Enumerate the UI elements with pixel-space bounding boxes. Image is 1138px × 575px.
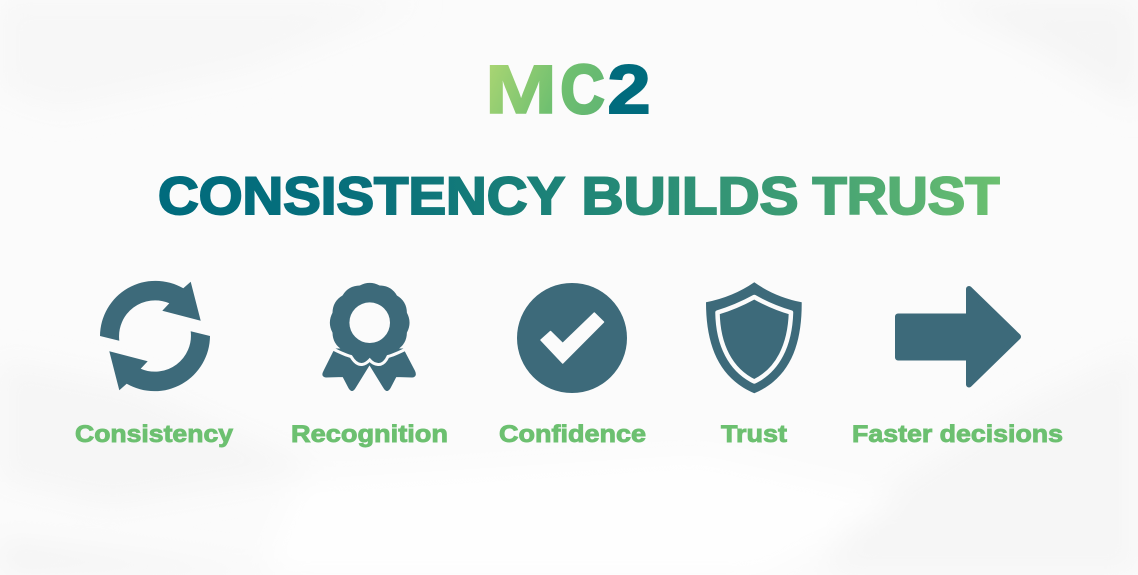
title: CONSISTENCY <box>158 167 565 226</box>
icon: circular arrows <box>100 281 210 391</box>
item: confidence <box>499 283 646 448</box>
item: recognition <box>291 283 448 448</box>
label: consistency: Consistency <box>75 421 234 448</box>
label: trust: Trust <box>721 421 787 448</box>
logo: MC2: 2 <box>608 51 650 128</box>
icon: shield <box>706 282 802 393</box>
logo: MC2: M <box>485 51 557 128</box>
item: faster decisions <box>852 289 1063 448</box>
icon: check circle <box>517 283 627 393</box>
title: TRUST <box>812 167 1000 226</box>
logo: MC2: C <box>560 51 604 128</box>
label: faster decisions: Faster decisions <box>852 421 1063 448</box>
label: confidence: Confidence <box>499 421 646 448</box>
label: recognition: Recognition <box>291 421 448 448</box>
logo: MC2 <box>485 51 650 128</box>
title: BUILDS <box>582 167 798 226</box>
item: consistency <box>75 281 234 448</box>
title <box>158 167 1000 226</box>
icon: right arrow <box>898 289 1018 384</box>
icon: award badge <box>323 283 415 390</box>
item: trust <box>706 282 802 448</box>
